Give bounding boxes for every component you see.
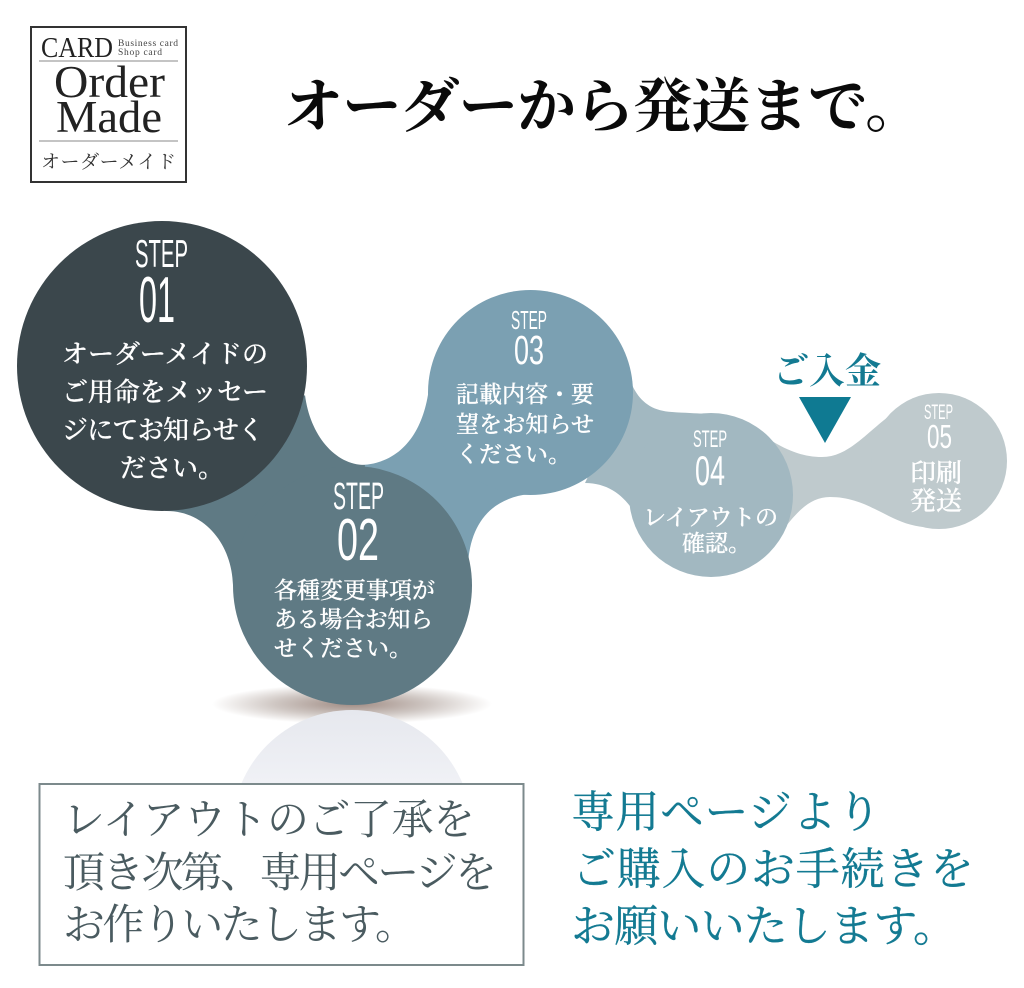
title: オーダーから発送まで。 <box>284 74 924 140</box>
step 2 bubble: STEP <box>333 476 384 518</box>
logo: Card Order Made: Made <box>56 92 162 142</box>
step 3 bubble: 03 <box>514 327 544 373</box>
step 3 bubble: 望をお知らせ <box>456 412 594 437</box>
step 3 bubble: 記載内容・要 <box>456 382 594 407</box>
logo: Card Order Made <box>31 27 186 182</box>
step 1 bubble: 01 <box>139 263 175 336</box>
payment label: ご入金 <box>773 351 881 391</box>
step 4 bubble: STEP <box>693 426 727 453</box>
purchase note: 専用ページより <box>571 788 881 837</box>
logo: Card Order Made: Business card <box>118 39 178 49</box>
step 2 bubble <box>165 395 472 705</box>
step 5 bubble: 発送 <box>910 487 962 516</box>
purchase note <box>571 788 974 951</box>
logo: Card Order Made: CARD <box>41 33 113 64</box>
step 4 bubble: 04 <box>695 447 725 494</box>
step 4 bubble <box>585 385 793 577</box>
step 3 bubble: ください。 <box>456 442 571 467</box>
step 1 bubble: ご用命をメッセー <box>62 378 268 407</box>
step 1 bubble <box>17 221 307 511</box>
shadow under step 2 <box>212 684 492 724</box>
arrow: payment down triangle <box>799 397 851 443</box>
step 1 bubble: ジにてお知らせく <box>62 416 264 445</box>
panel: layout approval note: レイアウトのご了承を <box>63 798 475 844</box>
step 5 bubble: 印刷 <box>910 459 962 488</box>
logo: Card Order Made: オーダーメイド <box>41 151 176 173</box>
step 2 bubble: 02 <box>337 507 379 573</box>
step 4 bubble: 確認。 <box>682 531 751 556</box>
step 3 bubble <box>358 290 633 565</box>
panel: layout approval note: 頂き次第、専用ページを <box>63 851 497 897</box>
purchase note: ご購入のお手続きを <box>572 845 974 894</box>
panel: layout approval note <box>40 784 524 965</box>
step 1 bubble: STEP <box>135 233 188 276</box>
step 2 bubble: 各種変更事項が <box>274 578 435 603</box>
step 1 bubble: ださい。 <box>120 454 224 483</box>
step 2 bubble: せください。 <box>274 636 412 661</box>
logo: Card Order Made: Order <box>54 56 165 107</box>
logo: Card Order Made: Shop card <box>118 48 162 58</box>
step 5 bubble: 05 <box>927 418 952 455</box>
step 1 bubble: オーダーメイドの <box>62 340 268 369</box>
purchase note: お願いいたします。 <box>571 902 957 951</box>
step 3 bubble: STEP <box>511 305 547 335</box>
step 5 bubble: STEP <box>924 401 953 424</box>
panel: layout approval note: お作りいたします。 <box>63 903 417 949</box>
reflection of step 2 <box>242 710 462 783</box>
step 2 bubble: ある場合お知ら <box>274 607 433 632</box>
step 4 bubble: レイアウトの <box>643 505 778 530</box>
step 5 bubble <box>770 393 1007 530</box>
